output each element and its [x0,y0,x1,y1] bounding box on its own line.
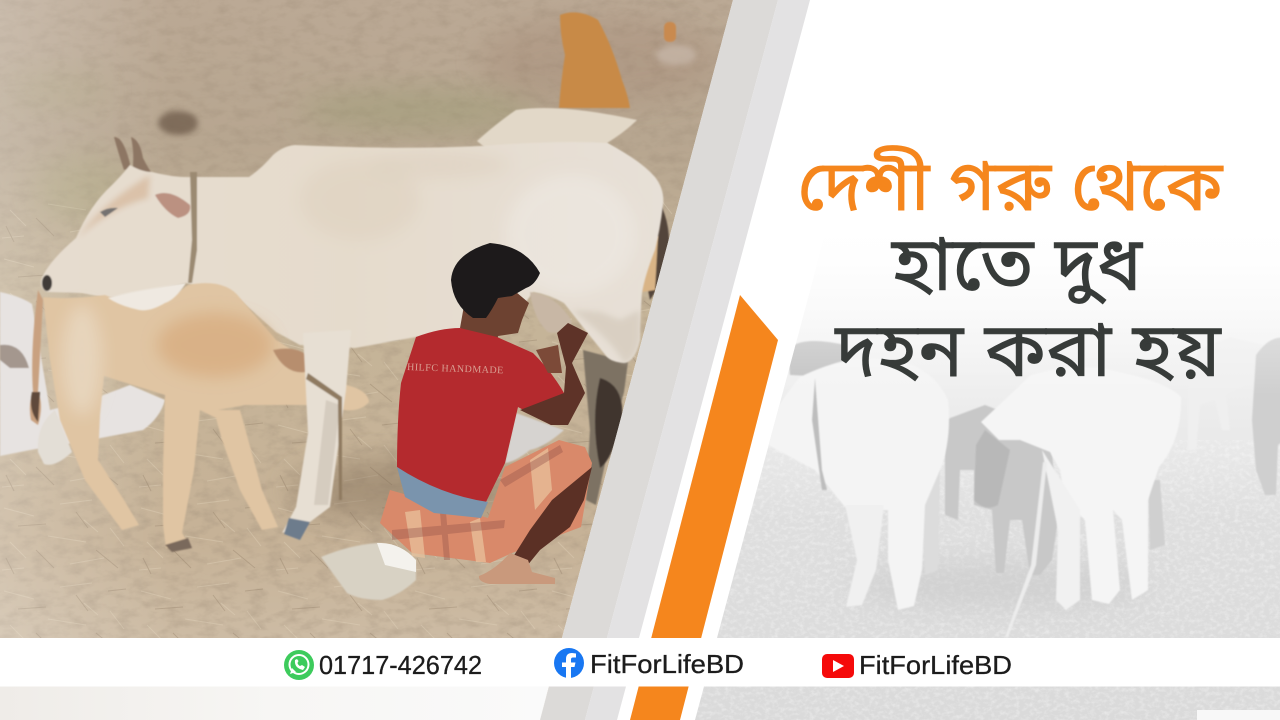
cow tail and rear leg [583,190,669,505]
icon: whatsapp [284,650,314,680]
milker [321,243,592,600]
red shirt [397,328,564,502]
second cow hump [477,107,637,146]
cow dewlap and front leg [108,283,351,540]
face and neck [460,293,529,338]
calf [30,283,369,552]
lungi [380,440,592,563]
grey diagonal band light [585,0,810,720]
panel: milking photo [0,0,760,720]
shirt print: HILFC HANDMADE [407,362,504,376]
contact bar [0,638,1280,686]
icon: facebook [554,648,584,678]
grey diagonal band dark [540,0,778,720]
milk bucket [505,413,564,463]
orange diagonal slash [630,295,778,720]
youtube handle: FitForLifeBD [859,650,1012,680]
udder [530,292,572,333]
lying white cow [0,292,165,465]
title line 3: দহন করা হয় [834,308,1222,393]
corner white patch [1197,710,1280,720]
facebook handle: FitForLifeBD [590,649,744,679]
leg and foot [514,467,592,564]
title line 1: দেশী গরু থেকে [797,146,1223,226]
background orange cow [559,12,696,108]
grey dark cow [920,405,1165,575]
title [797,146,1223,393]
title line 2: হাতে দুধ [891,222,1144,307]
grey distant cows [1252,338,1280,496]
panel: greyscale herd photo [695,328,1280,720]
main white cow body [41,137,663,363]
grey white cow right [981,403,1180,636]
white pot [321,543,416,600]
icon: youtube [822,654,854,678]
blue waistband [397,467,488,518]
bottom white strip [0,686,549,720]
whatsapp number: 01717-426742 [319,650,482,680]
white fade over photo [790,338,1280,366]
grey white cow left [766,341,949,610]
hair [451,243,540,318]
arm [520,323,588,425]
